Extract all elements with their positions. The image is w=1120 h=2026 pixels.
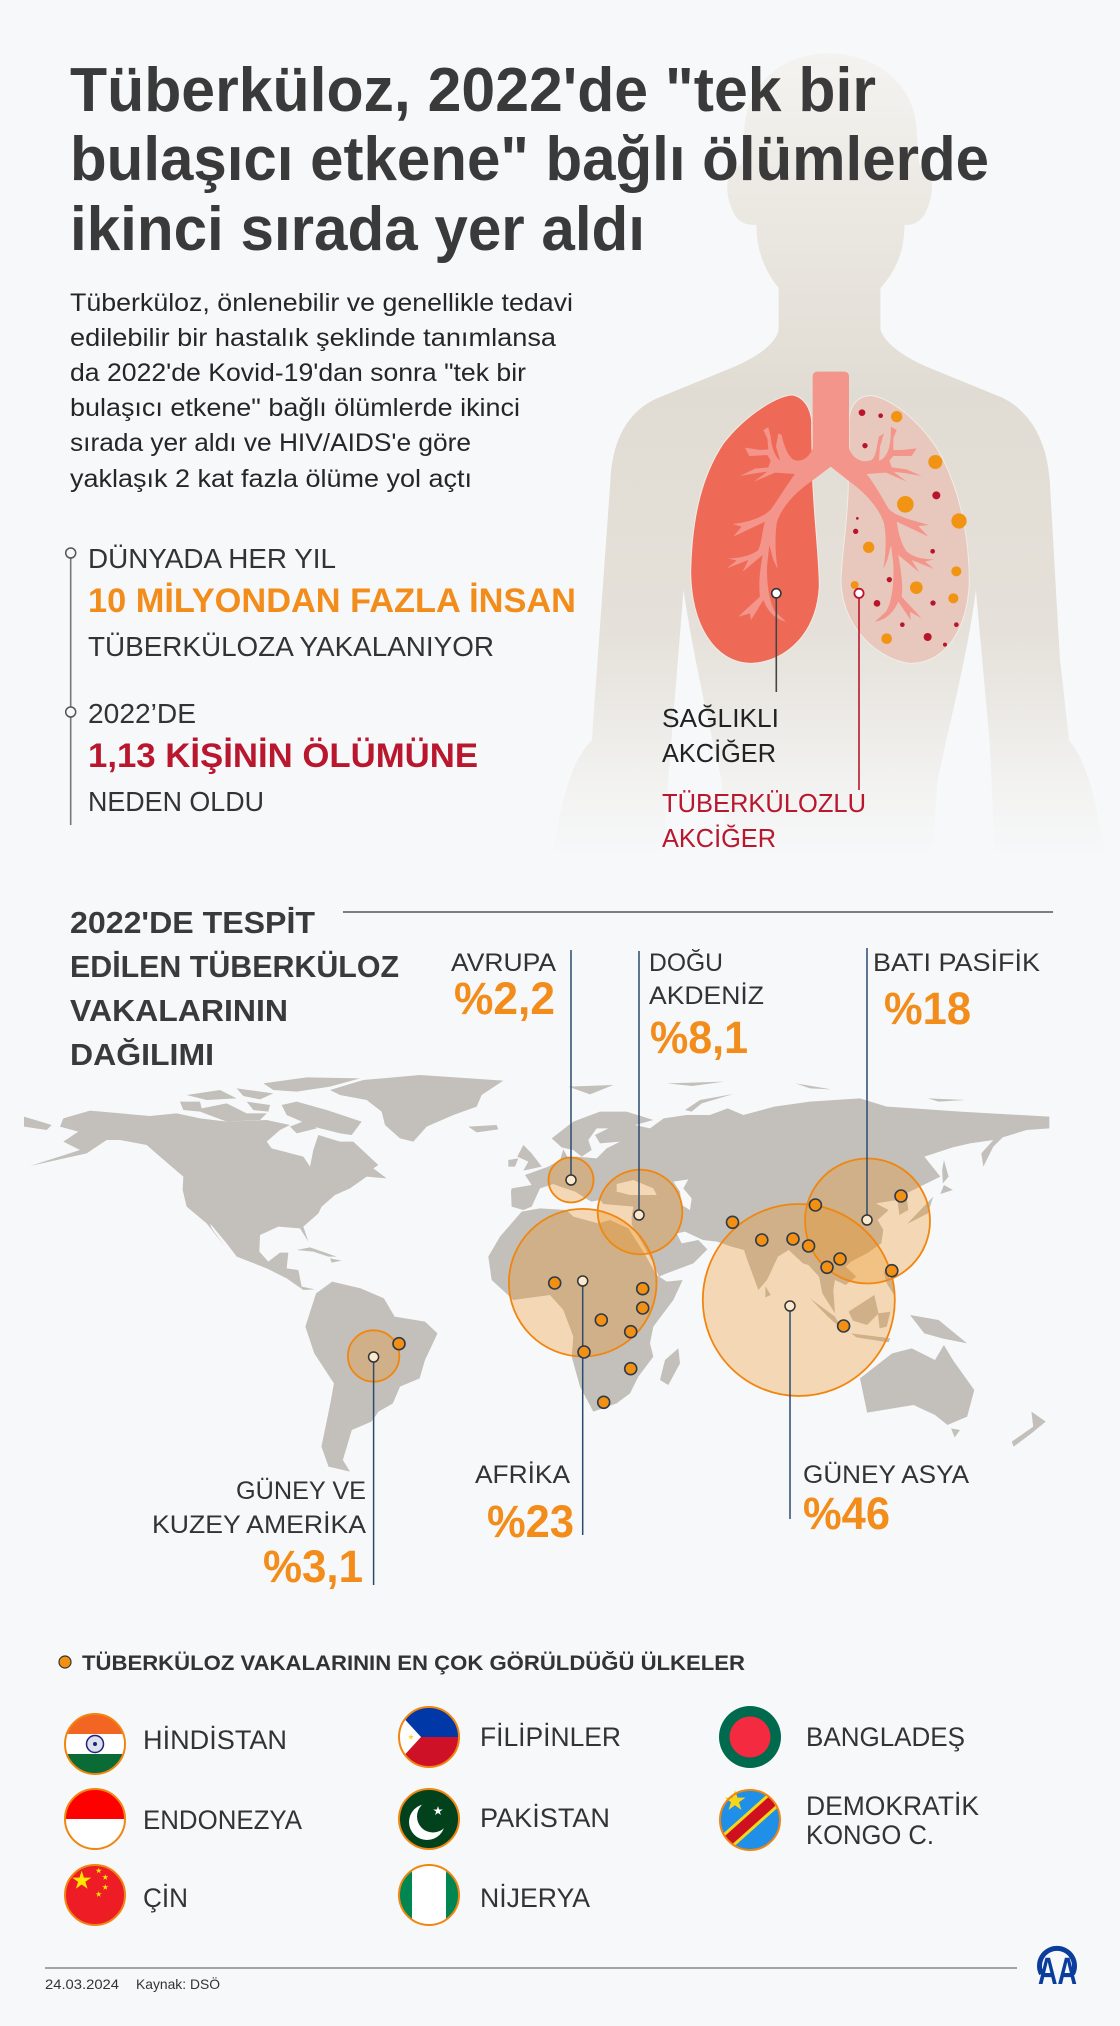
callout: tuberculosis lung: AKCİĞER	[662, 823, 776, 853]
map: South America	[305, 1282, 437, 1472]
country: Indonesia	[65, 1789, 302, 1849]
label: South Asia	[803, 1461, 969, 1539]
country: DR Congo: KONGO C.	[806, 1820, 934, 1850]
title	[70, 56, 989, 264]
statistic: deaths: NEDEN OLDU	[88, 786, 264, 817]
callout: healthy lung: SAĞLIKLI	[662, 703, 779, 733]
label: Africa	[475, 1460, 574, 1547]
label: Americas: %3,1	[263, 1541, 363, 1592]
section heading: distribution: 2022'DE TESPİT	[70, 905, 315, 940]
lungs	[691, 372, 969, 663]
country: DR Congo	[720, 1790, 979, 1850]
intro text block: da 2022'de Kovid-19'dan sonra "tek bir	[70, 359, 526, 387]
country: India	[65, 1714, 287, 1774]
bronchi: tuberculosis side	[831, 427, 934, 622]
timeline	[66, 548, 76, 825]
intro text block	[70, 289, 573, 493]
section heading: distribution: DAĞILIMI	[70, 1037, 214, 1072]
title: ikinci sırada yer aldı	[70, 195, 645, 264]
title: Tüberküloz, 2022'de "tek bir	[70, 56, 876, 125]
label: Americas	[152, 1477, 366, 1592]
country: Nigeria: NİJERYA	[480, 1882, 590, 1913]
label: Americas: GÜNEY VE	[236, 1477, 366, 1505]
country: Bangladesh: BANGLADEŞ	[806, 1722, 965, 1752]
tuberculosis lung	[841, 396, 969, 663]
label: Africa: %23	[487, 1496, 574, 1547]
section heading: distribution: EDİLEN TÜBERKÜLOZ	[70, 949, 399, 984]
body silhouette	[551, 53, 1106, 860]
callout: tuberculosis lung	[662, 589, 866, 853]
country: Nigeria	[399, 1865, 590, 1925]
country: DR Congo: DEMOKRATİK	[806, 1790, 979, 1821]
label: Eastern Mediterranean: %8,1	[650, 1012, 748, 1063]
country: Indonesia: ENDONEZYA	[143, 1805, 302, 1835]
country: Philippines: FİLİPİNLER	[480, 1721, 621, 1752]
country markers	[393, 1190, 907, 1408]
statistic: deaths	[88, 698, 478, 817]
region bubbles	[348, 1158, 930, 1396]
bubble: Europe	[548, 1158, 594, 1202]
tuberculosis spots	[851, 409, 967, 647]
country: China: ÇİN	[143, 1882, 188, 1913]
statistic: yearly cases: 10 MİLYONDAN FAZLA İNSAN	[88, 582, 576, 620]
callout: tuberculosis lung: TÜBERKÜLOZLU	[662, 788, 866, 818]
label: Eastern Mediterranean	[649, 948, 764, 1063]
label: South Asia: %46	[803, 1488, 890, 1539]
label: Eastern Mediterranean: DOĞU	[649, 948, 723, 977]
bubble: Africa	[509, 1209, 656, 1356]
icon: agency logo	[1038, 1948, 1077, 1993]
label: Western Pacific	[873, 948, 1040, 1034]
intro text block: edilebilir bir hastalık şeklinde tanımlansa	[70, 324, 556, 352]
map: Europe, Asia and Africa	[488, 1085, 1049, 1412]
country: China	[65, 1865, 188, 1925]
label: Europe: AVRUPA	[451, 949, 556, 977]
legend heading: countries: TÜBERKÜLOZ VAKALARININ EN ÇOK GÖRÜLDÜĞÜ ÜLKELER	[82, 1651, 745, 1675]
intro text block: yaklaşık 2 kat fazla ölüme yol açtı	[70, 465, 472, 493]
section heading: distribution: VAKALARININ	[70, 993, 288, 1028]
footer: date and source	[45, 1968, 1017, 1992]
country: Pakistan: PAKİSTAN	[480, 1802, 610, 1833]
country: Philippines	[399, 1707, 621, 1767]
illustration: human silhouette with lungs	[551, 53, 1106, 860]
footer: date and source: 24.03.2024	[45, 1976, 119, 1992]
statistic: deaths: 1,13 KİŞİNİN ÖLÜMÜNE	[88, 737, 478, 775]
label: Africa: AFRİKA	[475, 1460, 570, 1489]
label: South Asia: GÜNEY ASYA	[803, 1461, 969, 1489]
country: Bangladesh	[719, 1706, 965, 1768]
section heading: distribution	[70, 905, 1053, 1072]
title: bulaşıcı etkene" bağlı ölümlerde	[70, 125, 989, 194]
callout: healthy lung	[662, 589, 781, 768]
label: Eastern Mediterranean: AKDENİZ	[649, 981, 764, 1010]
healthy lung	[691, 395, 819, 663]
bubble: Eastern Mediterranean	[598, 1170, 682, 1254]
intro text block: Tüberküloz, önlenebilir ve genellikle tedavi	[70, 289, 573, 317]
intro text block: sırada yer aldı ve HIV/AIDS'e göre	[70, 429, 471, 457]
bubble: South Asia	[703, 1204, 895, 1396]
country: India: HİNDİSTAN	[143, 1724, 287, 1755]
world map	[24, 1075, 1049, 1472]
country: Pakistan	[399, 1789, 610, 1849]
label: Europe	[451, 949, 556, 1024]
panel: key statistics	[66, 543, 576, 825]
statistic: yearly cases: TÜBERKÜLOZA YAKALANIYOR	[88, 631, 494, 662]
statistic: yearly cases	[88, 543, 576, 662]
leader lines	[374, 948, 867, 1585]
footer: date and source: Kaynak: DSÖ	[136, 1975, 220, 1992]
label: Western Pacific: %18	[884, 983, 971, 1034]
bubble: Western Pacific	[805, 1158, 930, 1284]
statistic: yearly cases: DÜNYADA HER YIL	[88, 543, 336, 574]
statistic: deaths: 2022’DE	[88, 698, 196, 729]
intro text block: bulaşıcı etkene" bağlı ölümlerde ikinci	[70, 394, 520, 422]
callout: healthy lung: AKCİĞER	[662, 738, 776, 768]
icon: agency logo: AA	[1038, 1951, 1077, 1993]
trachea	[813, 372, 849, 480]
bubble: Americas	[348, 1330, 399, 1382]
label: Western Pacific: BATI PASİFİK	[873, 948, 1040, 977]
map: Asia Pacific	[667, 1082, 1046, 1447]
label: Europe: %2,2	[454, 973, 555, 1024]
region centre points	[369, 1175, 872, 1362]
map: North America and Greenland	[24, 1075, 503, 1290]
bronchi: healthy side	[727, 427, 831, 622]
label: Americas: KUZEY AMERİKA	[152, 1510, 366, 1539]
